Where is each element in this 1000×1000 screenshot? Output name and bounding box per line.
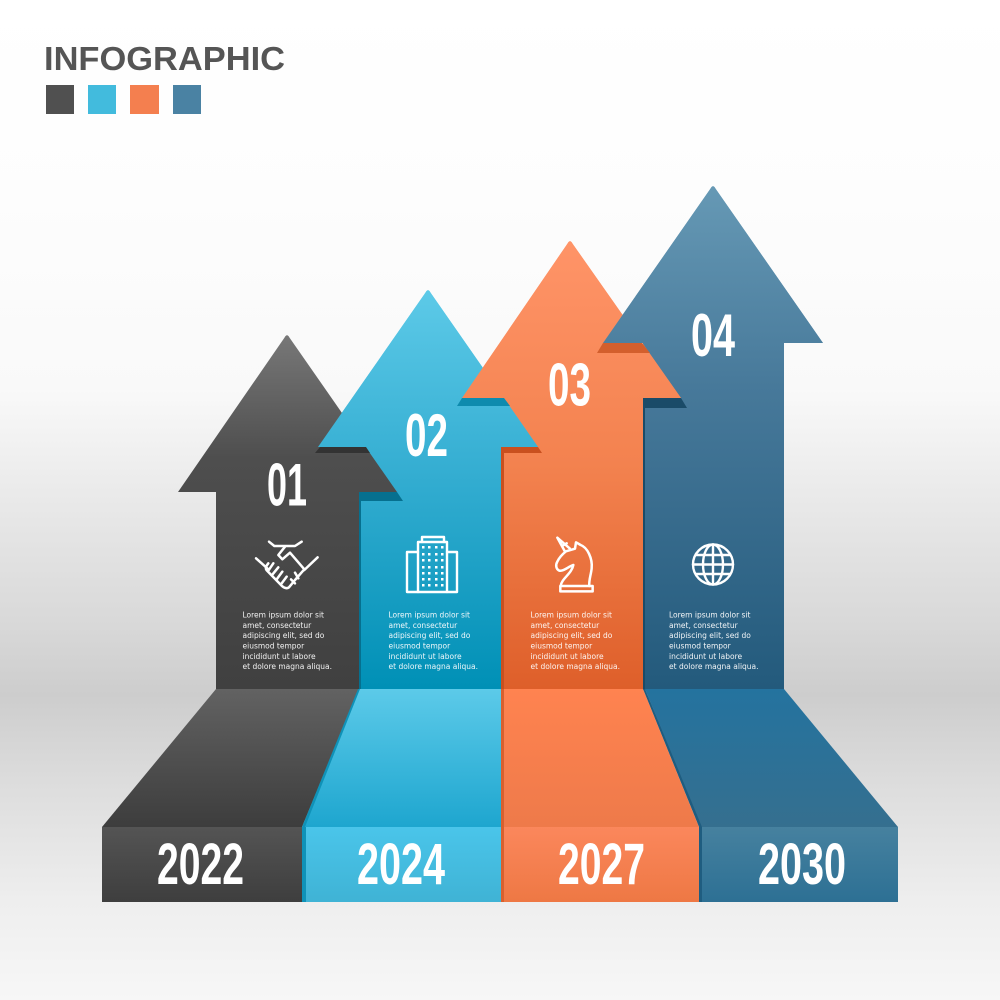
text block 4: Lorem ipsum dolor sit (669, 610, 751, 620)
year tab 2027: 2027 (558, 832, 645, 897)
text block 1: incididunt ut labore (242, 652, 316, 661)
text block 2: Lorem ipsum dolor sit (388, 610, 470, 620)
floor panel 2030 (643, 689, 898, 827)
arrow 4 body (603, 186, 823, 690)
text block 3: incididunt ut labore (530, 652, 604, 661)
arrow 3 body (462, 241, 681, 690)
text block 4: eiusmod tempor (669, 642, 732, 650)
text block 3: et dolore magna aliqua. (530, 662, 620, 671)
arrow 2 head overlap (318, 290, 538, 447)
text block 2: adipiscing elit, sed do (388, 631, 471, 640)
text block 3: amet, consectetur (530, 621, 600, 630)
text block 1: amet, consectetur (242, 621, 312, 630)
floor panel 2024 (302, 689, 501, 827)
shadow of arrow 3 head on arrow 2 (457, 398, 510, 406)
arrow 2 body (318, 290, 538, 690)
colour legend swatches (46, 85, 201, 114)
year tab 2030: 2030 (758, 832, 846, 897)
text block 4: adipiscing elit, sed do (669, 631, 751, 640)
text block 2: incididunt ut labore (388, 652, 462, 661)
shadow of arrow 2 head on arrow 1 (315, 447, 370, 453)
shadow of arrow 4 head on arrow 3 (597, 343, 650, 353)
arrow 4 head overlap (603, 186, 823, 343)
text block 2: et dolore magna aliqua. (388, 662, 478, 671)
arrow 3 head overlap (462, 241, 681, 398)
icon: unicorn chess knight (556, 538, 593, 591)
year tab 2024: 2024 (357, 832, 445, 897)
text block 4: incididunt ut labore (669, 652, 743, 661)
number 04: 04 (691, 302, 735, 369)
floor panel 2027 (501, 689, 699, 827)
icon: globe (693, 544, 733, 584)
icon: handshake (256, 542, 318, 588)
text block 2: amet, consectetur (388, 621, 458, 630)
text block 1: adipiscing elit, sed do (242, 631, 325, 640)
title: INFOGRAPHIC (44, 40, 285, 77)
icon: building (407, 537, 457, 592)
text block 2: eiusmod tempor (388, 642, 451, 650)
year tab 2024 (302, 827, 501, 902)
year tab 2027 (501, 827, 699, 902)
shadow of arrow 2 wing on arrow 3 (500, 447, 542, 690)
year tab 2030 (699, 827, 898, 902)
text block 1: Lorem ipsum dolor sit (242, 610, 324, 620)
year tab 2022: 2022 (157, 832, 244, 897)
number 02: 02 (405, 402, 448, 469)
arrow 1 body (178, 335, 397, 690)
year tab 2022 (102, 827, 302, 902)
text block 3: Lorem ipsum dolor sit (530, 610, 612, 620)
text block 4: et dolore magna aliqua. (669, 662, 759, 671)
text block 3: eiusmod tempor (530, 642, 593, 650)
text block 4: amet, consectetur (669, 621, 739, 630)
text block 3: adipiscing elit, sed do (530, 631, 613, 640)
shadow of arrow 1 wing on arrow 2 (358, 492, 403, 690)
text block 1: eiusmod tempor (242, 642, 305, 650)
number 01: 01 (267, 452, 307, 518)
floor panel 2022 (102, 689, 359, 827)
text block 1: et dolore magna aliqua. (242, 662, 332, 671)
number 03: 03 (548, 352, 591, 418)
shadow of arrow 3 wing on arrow 4 (642, 398, 687, 690)
